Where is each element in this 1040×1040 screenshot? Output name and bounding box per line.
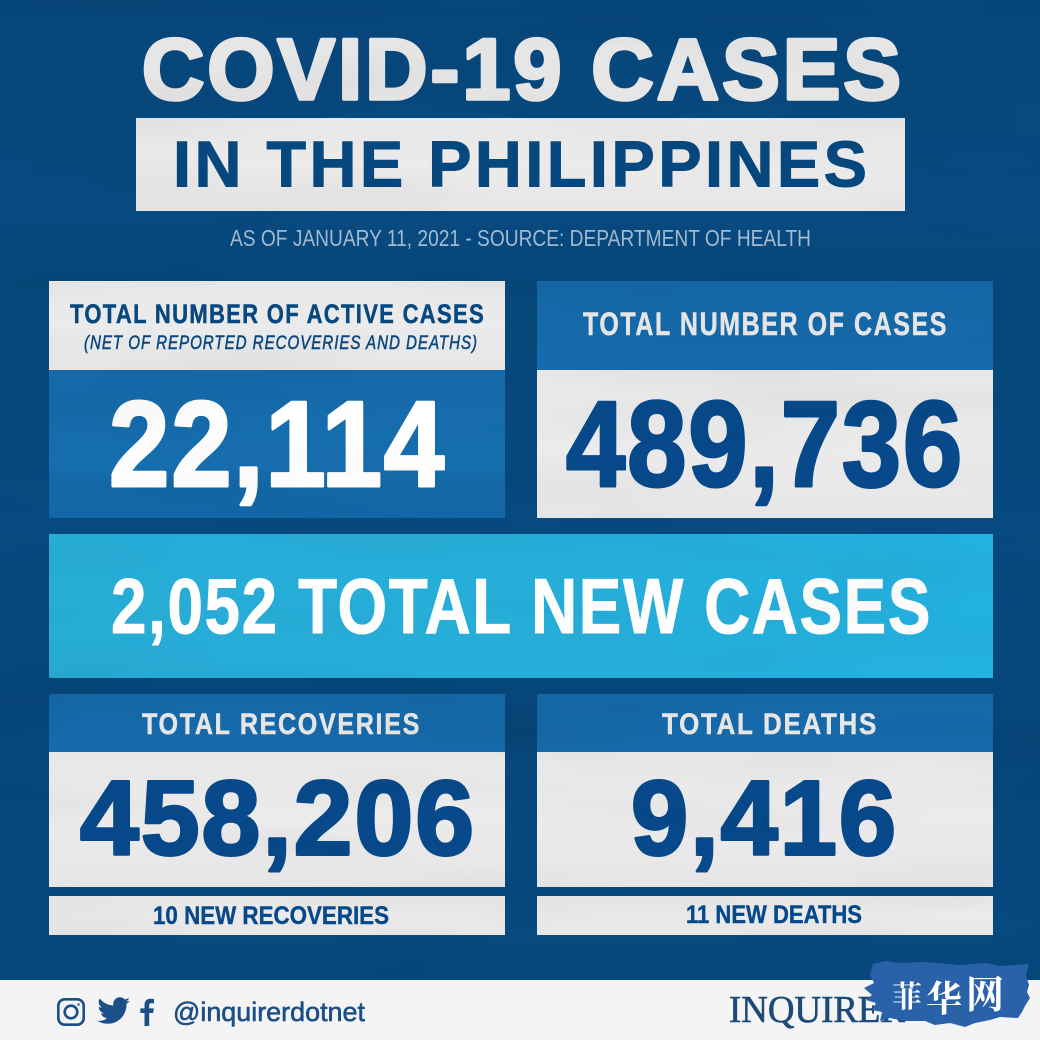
icon: facebook [140, 999, 154, 1026]
number: total cases: 489,736 [566, 376, 964, 512]
icon: instagram [58, 999, 84, 1025]
watermark: brush logo: 网 [966, 964, 1004, 1019]
number: total recoveries: 458,206 [80, 760, 476, 878]
footer bar [0, 980, 1040, 1040]
watermark: brush logo [864, 961, 1030, 1027]
logo: inquirer: INQUIRER [729, 989, 906, 1031]
heading: total recoveries: TOTAL RECOVERIES [142, 708, 421, 741]
panel: total recoveries [49, 694, 505, 935]
panel: total deaths [537, 694, 993, 935]
note: new recoveries: 10 NEW RECOVERIES [153, 902, 389, 930]
handle: @inquirerdotnet [173, 997, 365, 1027]
source line: AS OF JANUARY 11, 2021 - SOURCE: DEPARTMENT OF HEALTH [230, 225, 811, 251]
heading: total cases: TOTAL NUMBER OF CASES [583, 306, 948, 342]
heading: total active cases: TOTAL NUMBER OF ACTIVE CASES [70, 299, 485, 329]
number: total deaths: 9,416 [631, 760, 898, 878]
panel: total new cases [49, 534, 993, 678]
panel: active cases [49, 281, 505, 518]
icon: twitter [97, 997, 130, 1024]
watermark: brush logo: 华 [926, 971, 962, 1022]
heading: total deaths: TOTAL DEATHS [662, 708, 878, 741]
number: active cases: 22,114 [109, 376, 446, 512]
subtitle banner: in the Philippines: IN THE PHILIPPINES [173, 128, 867, 200]
note: new deaths: 11 NEW DEATHS [686, 901, 862, 929]
note: net of recoveries and deaths: (NET OF REPORTED RECOVERIES AND DEATHS) [84, 333, 478, 354]
watermark: brush logo: 菲 [892, 972, 922, 1016]
panel: total cases [537, 281, 993, 518]
title: COVID-19 CASES: COVID-19 CASES [142, 22, 904, 118]
